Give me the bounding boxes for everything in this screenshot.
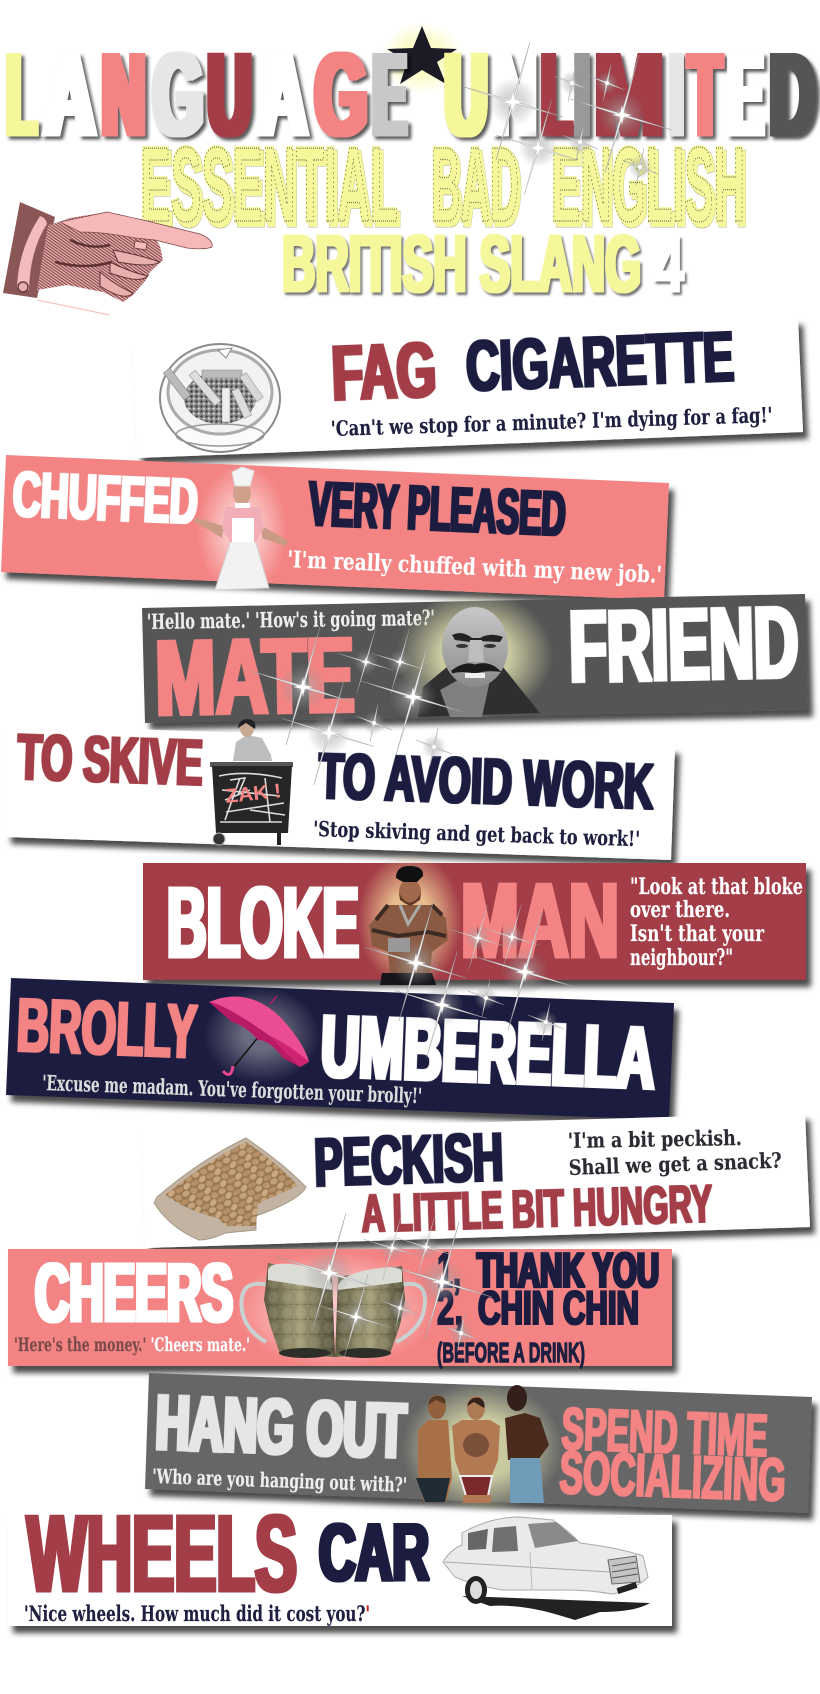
- title: Language Unlimited: G: [315, 29, 367, 160]
- example sentence: 'Nice wheels. How much did it cost you?': [24, 1601, 370, 1626]
- title: Language Unlimited: A: [258, 29, 307, 160]
- title: Language Unlimited: [7, 29, 815, 160]
- example sentence: 'Who are you hanging out with?': [152, 1464, 408, 1497]
- title: Language Unlimited: N: [493, 29, 536, 160]
- meaning: thank you, chin chin: 2,: [437, 1281, 463, 1334]
- panel background: [8, 1249, 672, 1366]
- meaning: thank you, chin chin: [437, 1244, 659, 1368]
- sparkles: cheers: [277, 1213, 492, 1358]
- photo: three-wheeled car: [443, 1517, 650, 1620]
- icon: black star: [380, 22, 464, 94]
- panel: peckish: [142, 1113, 810, 1248]
- panel background: [6, 725, 675, 860]
- panel: to skive: [6, 719, 675, 860]
- photo: man on wheelie bin: [210, 719, 293, 845]
- sparkles: bloke and brolly: [364, 903, 575, 1057]
- subtitle: Essential Bad English: BAD: [434, 130, 522, 248]
- word: WHEELS: WHEELS: [27, 1493, 297, 1615]
- panel: chuffed: [1, 455, 669, 600]
- sparkles: mate: [251, 627, 463, 785]
- subtitle: British Slang 4: 4: [654, 220, 684, 308]
- panel background: [6, 978, 674, 1120]
- photo: man in leather harness: [358, 852, 462, 988]
- subtitle: Essential Bad English: ESSENTIAL: [140, 126, 398, 244]
- example sentence: [630, 874, 803, 971]
- icon: pink umbrella: [204, 987, 320, 1083]
- example sentence: 'Stop skiving and get back to work!': [313, 816, 640, 851]
- subtitle: Essential Bad English: BAD: [434, 130, 522, 248]
- panel: fag: [133, 318, 803, 458]
- panel background: [8, 1515, 672, 1626]
- title: Language Unlimited: U: [208, 29, 251, 160]
- subtitle: Essential Bad English: ESSENTIAL: [143, 130, 401, 248]
- word: PECKISH: PECKISH: [313, 1118, 504, 1201]
- title: Language Unlimited: E: [373, 29, 406, 160]
- title: Language Unlimited: M: [595, 29, 663, 160]
- title: Language Unlimited: L: [542, 29, 571, 160]
- title: Language Unlimited: T: [689, 29, 721, 160]
- photo: beer mugs: [235, 1252, 435, 1368]
- meaning: thank you, chin chin: THANK YOU: [477, 1244, 659, 1298]
- panel: mate: [142, 585, 808, 738]
- example sentence: 'Excuse me madam. You've forgotten your brolly!': [42, 1070, 422, 1108]
- example sentence: 'Hello mate.' 'How's it going mate?': [147, 605, 435, 634]
- icon: pointing hand: [3, 202, 212, 315]
- sparkles: title: [461, 42, 672, 194]
- subtitle: Essential Bad English: BAD: [431, 126, 519, 244]
- word: CHUFFED: CHUFFED: [11, 458, 199, 538]
- word: BROLLY: BROLLY: [15, 983, 198, 1075]
- title: Language Unlimited: I: [670, 29, 683, 160]
- title: Language Unlimited: G: [153, 29, 203, 160]
- panel background: [145, 1373, 812, 1513]
- subtitle: Essential Bad English: BAD: [431, 126, 519, 244]
- panel: hang out: [145, 1373, 812, 1514]
- meaning: VERY PLEASED: VERY PLEASED: [307, 469, 567, 550]
- meaning: CAR: CAR: [319, 1508, 429, 1598]
- panel: wheels: [8, 1493, 672, 1626]
- photo: nurse: [192, 464, 288, 596]
- example sentence: neighbour?": [630, 945, 733, 971]
- photo: beans on toast: [154, 1138, 306, 1240]
- word: FAG: FAG: [330, 325, 438, 417]
- word: TO SKIVE: TO SKIVE: [17, 720, 204, 799]
- meaning: thank you, chin chin: (BEFORE A DRINK): [437, 1337, 585, 1368]
- example sentence: 'I'm a bit peckish.: [568, 1125, 742, 1153]
- word: HANG OUT: HANG OUT: [154, 1378, 407, 1475]
- panel background: [1, 455, 669, 600]
- word: MATE: MATE: [154, 615, 355, 738]
- title: Language Unlimited: U: [445, 29, 487, 160]
- panel background: [142, 1113, 810, 1248]
- title: Language Unlimited: A: [44, 29, 95, 160]
- title: Language Unlimited: I: [575, 29, 589, 160]
- example sentence: Shall we get a snack?: [568, 1148, 782, 1180]
- photo: man on wheelie bin: ZAK !: [224, 780, 282, 808]
- meaning: thank you, chin chin: CHIN CHIN: [478, 1281, 639, 1334]
- photo: ashtray: [160, 344, 280, 452]
- photo: three men: [402, 1382, 562, 1514]
- meaning: thank you, chin chin: 1,: [437, 1244, 461, 1298]
- example sentence: 'Here's the money.' 'Cheers mate.': [14, 1334, 250, 1356]
- word: CHEERS: CHEERS: [35, 1246, 233, 1339]
- title: Language Unlimited: L: [7, 29, 36, 160]
- panel: brolly: [6, 978, 674, 1120]
- meaning: spend time socializing: [559, 1396, 787, 1514]
- example sentence: Isn't that your: [630, 921, 764, 947]
- word: BLOKE: BLOKE: [167, 867, 359, 979]
- subtitle: Essential Bad English: ESSENTIAL: [140, 126, 398, 244]
- panel: bloke: [143, 852, 806, 988]
- panel background: [142, 594, 808, 723]
- example sentence: [568, 1125, 782, 1180]
- panel background: [143, 863, 806, 980]
- meaning: MAN: MAN: [461, 862, 619, 980]
- photo: grinning man: [397, 591, 553, 719]
- title: Language Unlimited: N: [102, 29, 145, 160]
- subtitle: Essential Bad English: ESSENTIAL: [143, 130, 401, 248]
- example sentence: 'I'm really chuffed with my new job.': [287, 546, 663, 589]
- panel background: [133, 318, 803, 458]
- title: Language Unlimited: E: [728, 29, 763, 160]
- panel: cheers: [8, 1244, 672, 1368]
- example sentence: over there.: [630, 897, 730, 923]
